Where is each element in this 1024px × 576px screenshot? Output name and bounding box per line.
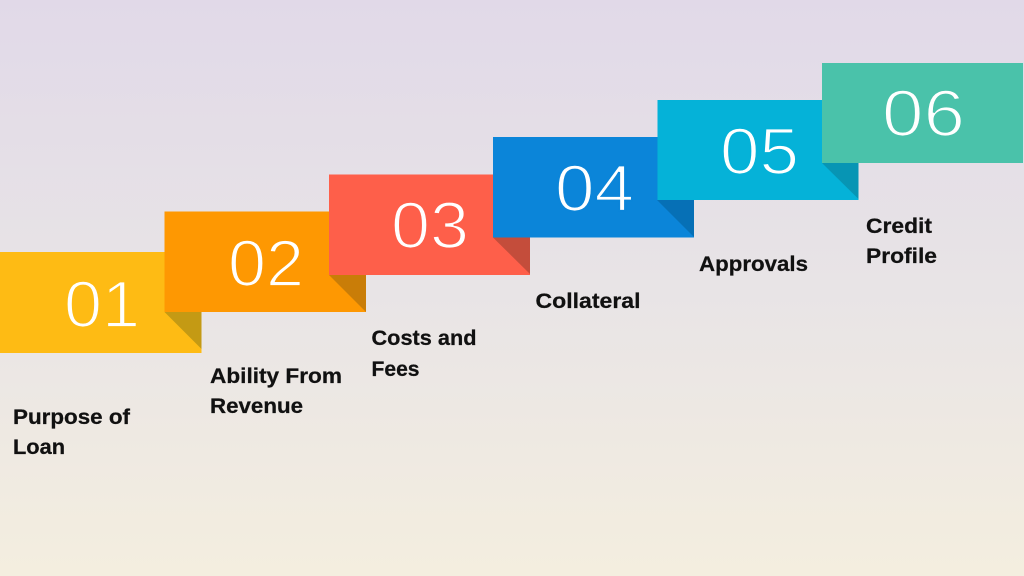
- label: Costs and Fees: Fees: [372, 357, 420, 381]
- label: Ability From Revenue: Ability From: [210, 364, 342, 388]
- label: Purpose of Loan: Purpose of: [13, 405, 131, 429]
- label: Costs and Fees: [372, 326, 476, 381]
- label: Ability From Revenue: Revenue: [210, 394, 303, 418]
- label: Approvals: Approvals: [699, 252, 808, 276]
- step 01 band: 01: [64, 267, 140, 341]
- step 04 band: [493, 137, 694, 238]
- step 05 band: 05: [720, 114, 799, 188]
- step 01 band: [0, 252, 202, 353]
- step 06 band: 06: [882, 76, 965, 150]
- step 02 band: [164, 212, 366, 312]
- label: Purpose of Loan: Loan: [13, 435, 65, 459]
- label: Credit Profile: [866, 214, 937, 268]
- label: Ability From Revenue: [210, 364, 342, 418]
- label: Purpose of Loan: [13, 405, 131, 459]
- label: Collateral: Collateral: [536, 289, 640, 313]
- step 06 band: [822, 63, 1023, 163]
- step 03 band: 03: [391, 188, 469, 262]
- step 02 band: 02: [228, 226, 304, 300]
- step 05 band: [658, 100, 858, 200]
- label: Credit Profile: Credit: [866, 214, 932, 238]
- step 03 band: [329, 174, 530, 275]
- label: Costs and Fees: Costs and: [372, 326, 476, 350]
- label: Credit Profile: Profile: [866, 244, 937, 268]
- step 04 band: 04: [555, 151, 634, 225]
